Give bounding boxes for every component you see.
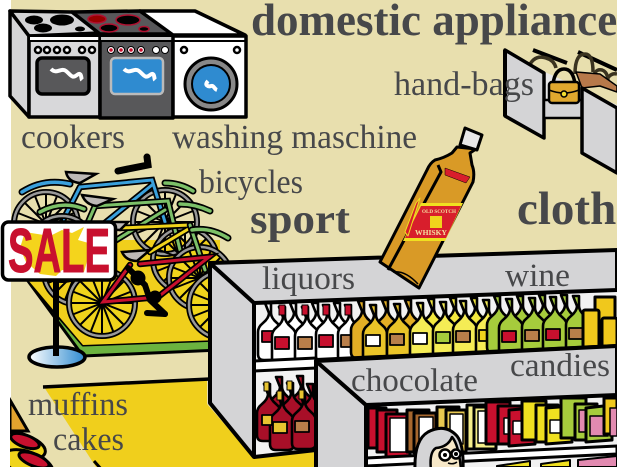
illustration: hand-bags display (505, 50, 617, 173)
label: hand-bags: hand-bags (394, 66, 534, 103)
label: liquors: liquors (262, 261, 355, 297)
top (316, 346, 617, 405)
label: cakes: cakes (53, 422, 124, 458)
label: chocolate: chocolate (351, 363, 478, 399)
icon: dark cooker (72, 11, 173, 118)
back bags (528, 54, 617, 84)
label: muffins: muffins (28, 387, 128, 423)
shelf unit top (210, 250, 617, 303)
shelf unit: liquors and wine (210, 250, 617, 457)
shelf unit: chocolate and candies (316, 346, 617, 467)
icon: cooker and washing machine row (10, 11, 246, 118)
bicycle: red (69, 250, 255, 338)
icon: yellow hand-bag (549, 69, 579, 103)
shelf interior (254, 290, 617, 457)
shelf: red bottles (254, 362, 324, 457)
yellow starburst (20, 227, 92, 276)
SALE lettering: SALE (8, 217, 110, 286)
bottle label text (415, 210, 456, 237)
side panel (316, 361, 366, 467)
bottle label text: OLD SCOTCH (422, 210, 456, 215)
icon: woman shopper (415, 428, 463, 467)
icon: white cooker (10, 11, 100, 117)
rack bars (533, 50, 617, 70)
label: wine: wine (505, 258, 570, 294)
icon: whisky bottle (380, 128, 482, 288)
chocolate boxes (368, 405, 496, 458)
heading: sport: sport (250, 197, 350, 243)
icon: washing machine (140, 11, 246, 117)
shelf: yellow wine bottles (410, 298, 500, 360)
candy bags (486, 398, 617, 446)
shelf: gold liquor bottles (351, 300, 422, 362)
lower shelf (366, 446, 617, 467)
shelf boards (254, 358, 316, 371)
illustration: parked bicycles (14, 157, 255, 338)
illustration: yellow sale floor with green edge (28, 240, 220, 356)
label: washing maschine: washing maschine (172, 119, 417, 156)
shelf: yellow cans (583, 297, 617, 348)
sign pole and base (29, 278, 85, 367)
shelf unit side panel (210, 263, 254, 457)
illustration: muffins and cakes display (10, 397, 54, 467)
label: bicycles: bicycles (199, 164, 303, 201)
illustration: lower yellow aisle floor (43, 379, 330, 467)
label: candies: candies (510, 348, 610, 384)
bicycle: green (30, 195, 217, 292)
bicycle: blue (14, 157, 197, 256)
bicycle: yellow (44, 222, 231, 309)
sign board (2, 222, 116, 280)
label: cookers: cookers (21, 119, 125, 156)
sale sign (2, 217, 116, 367)
shelf: white liquor bottles (258, 303, 362, 364)
bottle label text: WHISKY (415, 229, 447, 237)
shelf: green wine bottles (487, 295, 590, 356)
